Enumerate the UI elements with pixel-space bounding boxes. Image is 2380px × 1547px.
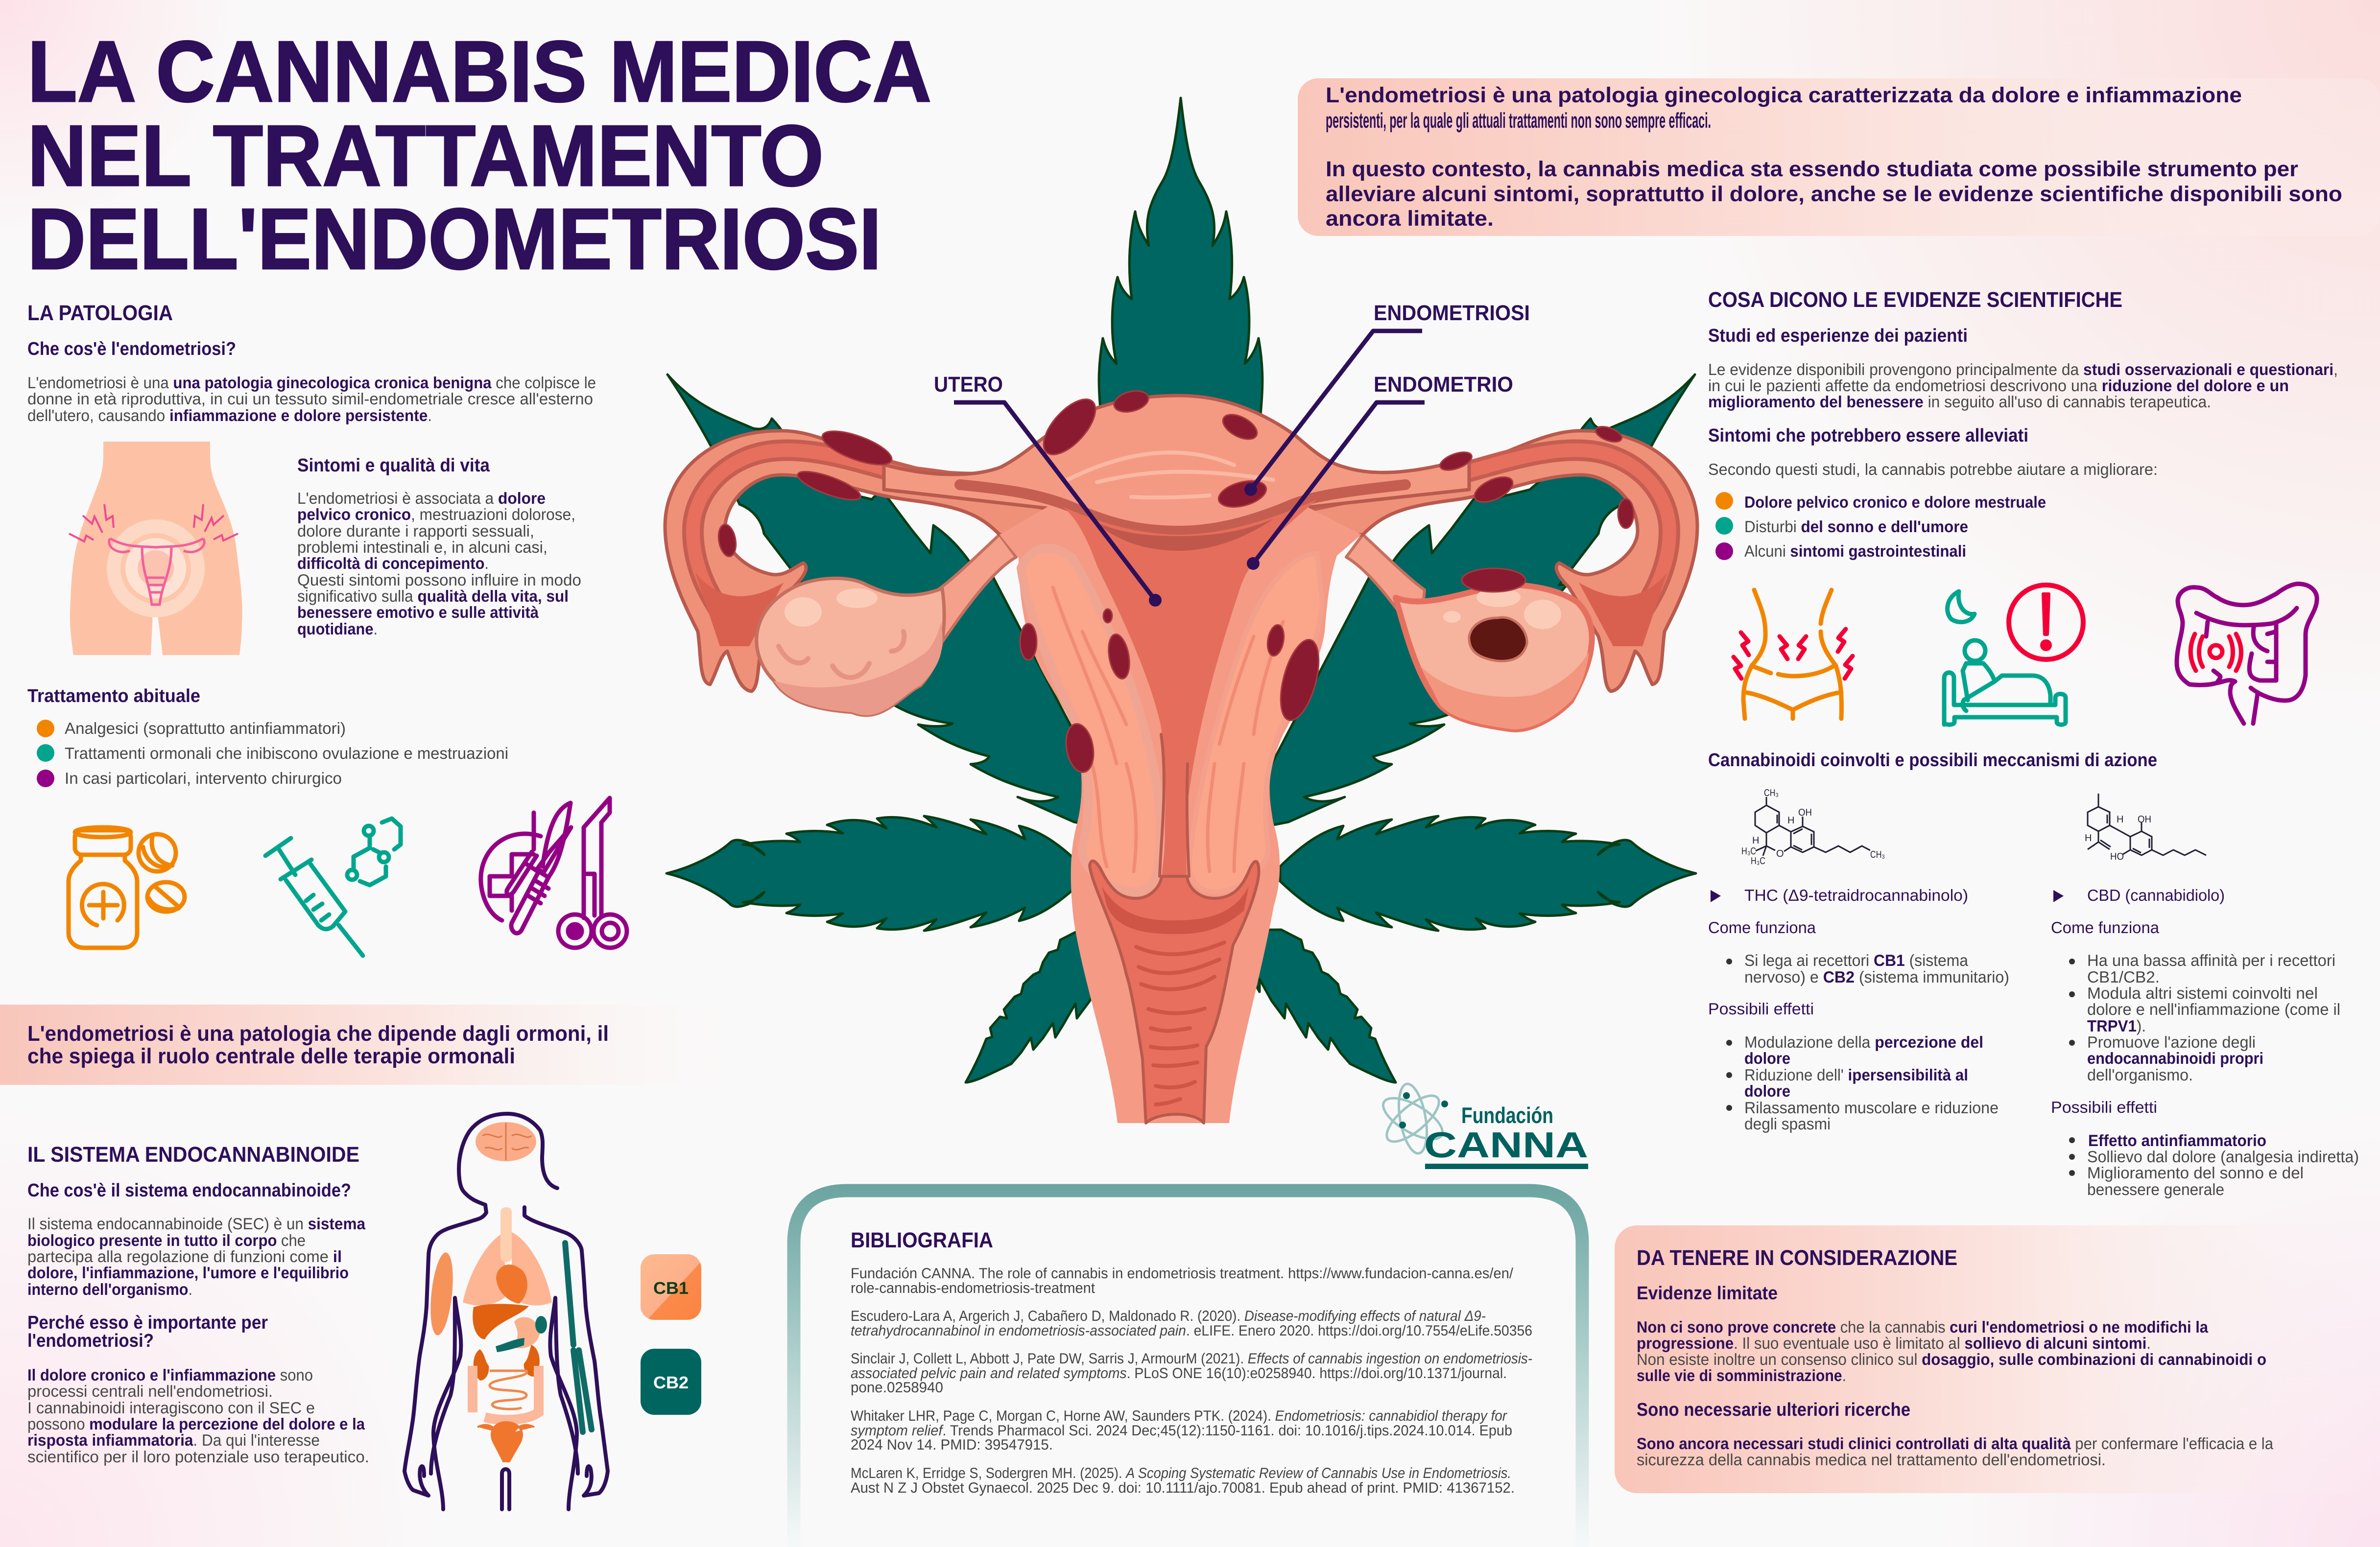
heading: la patologia: LA PATOLOGIA xyxy=(27,301,173,325)
tube continuation over fundus xyxy=(960,485,1405,531)
icon: pelvis with pain xyxy=(69,442,242,655)
list: possibili effetti xyxy=(2069,1131,2359,1198)
trachea xyxy=(500,1207,512,1262)
brain xyxy=(476,1122,536,1161)
panel: intro callout: alleviare alcuni sintomi, soprattutto il dolore, anche se le evidenze scientifiche disponibili sono xyxy=(1326,182,2342,206)
text: evidenze limitate xyxy=(1637,1318,2266,1384)
list: come funziona: Modula altri sistemi coinvolti nel xyxy=(2087,984,2318,1002)
icon: surgery tools xyxy=(481,798,627,948)
liver xyxy=(473,1304,529,1339)
molecule: THC: OH xyxy=(1798,807,1812,818)
molecule: THC: O xyxy=(1776,848,1784,859)
logo: fundación canna: Fundación xyxy=(1461,1102,1553,1128)
text: studi: in cui le pazienti affette da endometriosi descrivono una riduzione del dolore e un xyxy=(1708,376,2289,395)
panel: cosa dicono le evidenze xyxy=(1708,288,2338,771)
subheading: cannabinoidi: Cannabinoidi coinvolti e possibili meccanismi di azione xyxy=(1708,750,2157,771)
dark arc over cavity xyxy=(1097,519,1273,551)
text: definizione xyxy=(27,374,596,424)
label: endometrio: ENDOMETRIO xyxy=(1374,373,1513,397)
text: riferimenti: Sinclair J, Collett L, Abbott J, Pate DW, Sarris J, ArmourM (2021). Effects of cannabis ingestion on endometriosis- xyxy=(851,1351,1532,1367)
list: possibili effetti: Rilassamento muscolare e riduzione xyxy=(1744,1099,1999,1117)
text: riferimenti: associated pelvic pain and related symptoms. PLoS ONE 16(10):e0258940. https://doi.org/10.1371/journal. xyxy=(851,1365,1507,1382)
list: sintomi xyxy=(1715,492,2046,560)
label: endometriosi xyxy=(1244,301,1530,496)
kidneys xyxy=(474,1345,540,1381)
subheading: studi: Studi ed esperienze dei pazienti xyxy=(1708,326,1968,346)
leaf: horizontal right xyxy=(1280,816,1696,931)
list: trattamenti: Analgesici (soprattutto antinfiammatori) xyxy=(65,719,346,737)
text: riferimenti: Escudero-Lara A, Argerich J, Cabañero D, Maldonado R. (2020). Disease-modifying effects of natural Δ9- xyxy=(851,1308,1486,1324)
small intestine xyxy=(490,1371,527,1409)
text: sintomi: significativo sulla qualità della vita, sul xyxy=(297,587,569,605)
list: possibili effetti: Modulazione della percezione del xyxy=(1744,1033,1983,1051)
text: riferimenti: Aust N Z J Obstet Gynaecol. 2025 Dec 9. doi: 10.1111/ajo.70081. Epub ahead of print. PMID: 41367152. xyxy=(851,1480,1515,1496)
icon: syringe and hormone molecule xyxy=(265,819,401,956)
heading: bibliografia: BIBLIOGRAFIA xyxy=(851,1228,993,1252)
panel: bibliografia xyxy=(794,1191,1582,1547)
list: trattamenti: Trattamenti ormonali che inibiscono ovulazione e mestruazioni xyxy=(65,744,508,762)
logo: fundación canna: CANNA xyxy=(1424,1125,1588,1165)
receptor badge CB1: CB1 xyxy=(653,1279,689,1298)
list: come funziona: nervoso) e CB2 (sistema immunitario) xyxy=(1744,968,2009,986)
heading: CBD: CBD (cannabidiolo) xyxy=(2087,886,2225,904)
list: come funziona xyxy=(1726,951,2009,986)
text: sintomi: quotidiane. xyxy=(297,620,378,638)
fundus highlights xyxy=(1068,452,1273,497)
heading: THC: THC (Δ9-tetraidrocannabinolo) xyxy=(1744,886,1968,904)
text: sintomi xyxy=(297,489,581,638)
panel: sintomi e qualità di vita xyxy=(297,455,581,638)
list: come funziona: Si lega ai recettori CB1 (sistema xyxy=(1744,951,1969,969)
logo: fundación canna xyxy=(1377,1082,1588,1169)
text: importanza: processi centrali nell'endometriosi. xyxy=(27,1382,273,1400)
icon: sleep disturbance xyxy=(1944,585,2083,725)
receptor badge CB1 xyxy=(641,1254,701,1320)
title: NEL TRATTAMENTO xyxy=(27,107,824,204)
subheading: come funziona: Come funziona xyxy=(1708,918,1816,937)
text: riferimenti xyxy=(851,1266,1532,1496)
callout: ormoni: L'endometriosi è una patologia che dipende dagli ormoni, il xyxy=(27,1022,609,1046)
molecule: CBD: HO xyxy=(2110,851,2124,862)
panel: intro callout: persistenti, per la quale gli attuali trattamenti non sono sempre efficaci. xyxy=(1326,109,1711,133)
text: ricerche: Sono ancora necessari studi clinici controllati di alta qualità per confermare l'efficacia e la xyxy=(1637,1434,2274,1453)
subheading: sintomi alleviati: Sintomi che potrebbero essere alleviati xyxy=(1708,425,2028,446)
uterine cavity xyxy=(1063,499,1317,896)
leaf: upper left xyxy=(667,375,1126,832)
text: studi: Le evidenze disponibili provengono principalmente da studi osservazionali e questionari, xyxy=(1708,360,2338,378)
molecule: THC: CH₃ xyxy=(1764,788,1779,798)
title xyxy=(27,23,931,287)
subheading: perché xyxy=(27,1313,268,1351)
title: DELL'ENDOMETRIOSI xyxy=(27,190,881,287)
text: definizione: dell'utero, causando infiammazione e dolore persistente. xyxy=(27,406,432,424)
list: possibili effetti: degli spasmi xyxy=(1744,1115,1831,1133)
list: come funziona: endocannabinoidi propri xyxy=(2087,1049,2263,1067)
text: importanza: I cannabinoidi interagiscono con il SEC e xyxy=(27,1399,315,1417)
panel: il sistema endocannabinoide xyxy=(27,1143,369,1466)
text: sintomi: difficoltà di concepimento. xyxy=(297,554,489,572)
illustration: human body with organs xyxy=(405,1114,608,1509)
text: importanza xyxy=(27,1366,369,1466)
molecule: THC: H₃C xyxy=(1751,856,1765,867)
text: riferimenti: pone.0258940 xyxy=(851,1380,943,1396)
callout: ormoni xyxy=(0,1005,735,1085)
uterus fundus xyxy=(884,396,1469,531)
leaf: lower left xyxy=(966,930,1126,1082)
text: ricerche xyxy=(1637,1434,2274,1469)
list: come funziona: Ha una bassa affinità per i recettori xyxy=(2087,951,2335,969)
list: possibili effetti: dolore xyxy=(1744,1049,1790,1067)
large intestine xyxy=(473,1366,539,1420)
list: come funziona: dolore e nell'infiammazione (come il xyxy=(2087,1000,2340,1018)
ovary left xyxy=(757,578,944,715)
molecule: THC: H xyxy=(1787,815,1794,826)
leaf: upper right xyxy=(1236,375,1695,832)
pancreas xyxy=(496,1338,524,1352)
panel: la patologia xyxy=(27,301,596,424)
text: riferimenti: role-cannabis-endometriosis-treatment xyxy=(851,1280,1095,1296)
text: definizione: donne in età riproduttiva, in cui un tessuto simil-endometriale cresce all'esterno xyxy=(27,390,593,408)
text: sintomi: Questi sintomi possono influire in modo xyxy=(297,571,581,589)
molecule: CBD xyxy=(2085,794,2206,862)
text: riferimenti: McLaren K, Erridge S, Sodergren MH. (2025). A Scoping Systematic Review of Cannabis Use in Endometriosis. xyxy=(851,1465,1511,1481)
vaginal rugae xyxy=(1102,886,1249,934)
list: possibili effetti: Effetto antinfiammatorio xyxy=(2088,1131,2266,1149)
text: importanza: Il dolore cronico e l'infiammazione sono xyxy=(27,1366,313,1384)
ovary right with cyst xyxy=(1396,585,1592,729)
text: importanza: risposta infiammatoria. Da qui l'interesse xyxy=(27,1431,320,1449)
panel: THC xyxy=(1708,886,2009,1133)
text: evidenze limitate: sulle vie di somministrazione. xyxy=(1637,1366,1846,1384)
label: utero xyxy=(934,373,1162,607)
small uterus xyxy=(477,1422,534,1461)
subheading: trattamento: Trattamento abituale xyxy=(27,686,200,706)
list: possibili effetti: Miglioramento del sonno e del xyxy=(2087,1164,2304,1182)
panel: trattamento abituale xyxy=(27,686,627,956)
spleen xyxy=(535,1316,547,1334)
label: endometrio xyxy=(1247,373,1513,570)
leaf: horizontal left xyxy=(666,816,1082,931)
text: sintomi: benessere emotivo e sulle attività xyxy=(297,603,539,621)
molecule: CBD: OH xyxy=(2138,814,2151,825)
molecule: THC: CH₃ xyxy=(1870,849,1885,860)
uterine wall, right lobe xyxy=(1189,553,1322,892)
text: riferimenti: symptom relief. Trends Pharmacol Sci. 2024 Dec;45(12):1150-1161. doi: 10.1016/j.tips.2024.10.014. Epub xyxy=(851,1423,1512,1439)
callout: ormoni: che spiega il ruolo centrale delle terapie ormonali xyxy=(27,1044,515,1068)
list: possibili effetti xyxy=(1726,1033,1999,1133)
list: come funziona xyxy=(2069,951,2340,1084)
text: definizione SEC: dolore, l'infiammazione, l'umore e l'equilibrio xyxy=(27,1264,349,1282)
fallopian tube and ligament, right xyxy=(1285,431,1697,691)
text: definizione SEC: interno dell'organismo. xyxy=(27,1280,192,1298)
leaf: lower right xyxy=(1235,930,1396,1082)
molecule: CBD: H xyxy=(2085,833,2092,844)
subheading: ulteriori ricerche: Sono necessarie ulteriori ricerche xyxy=(1637,1400,1910,1420)
molecule: THC: H₃C xyxy=(1741,846,1756,857)
heart xyxy=(496,1265,527,1304)
panel: intro callout: In questo contesto, la cannabis medica sta essendo studiata come possibile strumento per xyxy=(1326,157,2298,181)
panel: CBD xyxy=(2051,886,2359,1198)
text: definizione SEC: partecipa alla regolazione di funzioni come il xyxy=(27,1247,342,1266)
fallopian tube and ligament, left xyxy=(665,431,1077,691)
text: evidenze limitate: Non ci sono prove concrete che la cannabis curi l'endometriosi o ne modifichi la xyxy=(1637,1318,2209,1336)
text: sintomi: L'endometriosi è associata a dolore xyxy=(297,489,546,507)
text: ricerche: sicurezza della cannabis medica nel trattamento dell'endometriosi. xyxy=(1637,1451,2106,1469)
list: sintomi: Disturbi del sonno e dell'umore xyxy=(1744,517,1968,536)
endometriosis lesions xyxy=(716,387,1634,774)
text: definizione SEC: biologico presente in tutto il corpo che xyxy=(27,1231,306,1249)
text: evidenze limitate: progressione. Il suo eventuale uso è limitato al sollievo di alcuni sintomi. xyxy=(1637,1334,2151,1352)
panel: intro callout xyxy=(1298,78,2380,236)
text: riferimenti: tetrahydrocannabinol in endometriosis-associated pain. eLIFE. Enero 2020. https://doi.org/10.7554/eLife.50356 xyxy=(851,1323,1532,1339)
text: sintomi: problemi intestinali e, in alcuni casi, xyxy=(297,538,547,556)
subheading: evidenze limitate: Evidenze limitate xyxy=(1637,1283,1778,1304)
list: possibili effetti: benessere generale xyxy=(2087,1180,2224,1198)
list: come funziona: dell'organismo. xyxy=(2087,1066,2193,1084)
list: possibili effetti: dolore xyxy=(1744,1082,1790,1100)
subheading: possibili effetti: Possibili effetti xyxy=(2051,1098,2157,1116)
text: riferimenti: 2024 Nov 14. PMID: 39547915. xyxy=(851,1437,1053,1453)
list: trattamenti xyxy=(37,719,508,787)
text: riferimenti: Whitaker LHR, Page C, Morgan C, Horne AW, Saunders PTK. (2024). Endometriosis: cannabidiol therapy for xyxy=(851,1408,1507,1424)
subheading: possibili effetti: Possibili effetti xyxy=(1708,1000,1814,1018)
leaf: top xyxy=(1099,98,1262,421)
label: endometriosi: ENDOMETRIOSI xyxy=(1374,301,1530,325)
list: come funziona: Promuove l'azione degli xyxy=(2087,1033,2256,1051)
panel: intro callout: ancora limitate. xyxy=(1326,207,1494,231)
text: definizione: L'endometriosi è una una patologia ginecologica cronica benigna che colpisce le xyxy=(27,374,596,392)
panel: intro callout: L'endometriosi è una patologia ginecologica caratterizzata da dolore e infiammazione xyxy=(1326,83,2242,107)
subheading: perché: Perché esso è importante per xyxy=(27,1313,268,1333)
illustration: cannabis leaf xyxy=(666,98,1696,1082)
list: possibili effetti: Sollievo dal dolore (analgesia indiretta) xyxy=(2087,1148,2359,1166)
list: sintomi: Dolore pelvico cronico e dolore mestruale xyxy=(1744,493,2046,511)
text: definizione SEC xyxy=(27,1215,366,1298)
heading: da tenere: DA TENERE IN CONSIDERAZIONE xyxy=(1637,1246,1957,1270)
list: trattamenti: In casi particolari, intervento chirurgico xyxy=(65,769,342,787)
molecule: CBD: H xyxy=(2117,814,2123,825)
subheading: che cos'è il sistema: Che cos'è il sistema endocannabinoide? xyxy=(27,1180,351,1201)
text: sintomi: dolore durante i rapporti sessuali, xyxy=(297,522,534,540)
subheading: che cos'è: Che cos'è l'endometriosi? xyxy=(27,339,236,359)
label: utero: UTERO xyxy=(934,373,1003,397)
text: importanza: scientifico per il loro potenziale uso terapeutico. xyxy=(27,1448,369,1466)
heading: sistema endocannabinoide: IL SISTEMA ENDOCANNABINOIDE xyxy=(27,1143,359,1167)
text: importanza: possono modulare la percezione del dolore e la xyxy=(27,1415,365,1433)
uterine wall, left lobe xyxy=(1021,548,1161,892)
stomach xyxy=(512,1317,540,1348)
icon: medicine bottle and pills xyxy=(69,827,185,948)
title: LA CANNABIS MEDICA xyxy=(27,23,931,120)
illustration: uterus anatomy xyxy=(665,387,1697,1123)
text: evidenze limitate: Non esiste inoltre un consenso clinico sul dosaggio, sulle combinazioni di cannabinoidi o xyxy=(1637,1350,2266,1368)
text: studi: miglioramento del benessere in seguito all'uso di cannabis terapeutica. xyxy=(1708,393,2211,411)
panel: da tenere in considerazione xyxy=(1615,1225,2380,1493)
list: come funziona: CB1/CB2. xyxy=(2087,968,2160,986)
text: riferimenti: Fundación CANNA. The role of cannabis in endometriosis treatment. https://www.fundacion-canna.es/en/ xyxy=(851,1266,1514,1282)
molecule: THC xyxy=(1741,788,1885,867)
lungs xyxy=(463,1232,552,1306)
list: sintomi: Alcuni sintomi gastrointestinali xyxy=(1744,542,1966,560)
list: possibili effetti: Riduzione dell' ipersensibilità al xyxy=(1744,1066,1968,1084)
cervical canal lines xyxy=(1160,734,1189,876)
uterus and vagina body xyxy=(1000,490,1361,1123)
icon: gastrointestinal xyxy=(2177,584,2317,724)
icon: pelvic pain xyxy=(1734,590,1853,719)
text: sintomi: pelvico cronico, mestruazioni dolorose, xyxy=(297,505,575,523)
receptor badge CB2 xyxy=(641,1349,701,1415)
arm muscle xyxy=(427,1251,456,1336)
receptor badge CB2: CB2 xyxy=(653,1373,689,1392)
text: definizione SEC: Il sistema endocannabinoide (SEC) è un sistema xyxy=(27,1215,366,1233)
arm bones xyxy=(565,1243,592,1432)
subheading: come funziona: Come funziona xyxy=(2051,918,2160,937)
subheading: sintomi: Sintomi e qualità di vita xyxy=(297,455,490,476)
subheading: perché: l'endometriosi? xyxy=(27,1331,154,1351)
wall streaks xyxy=(1053,587,1283,871)
text: studi xyxy=(1708,360,2338,411)
list: come funziona: TRPV1). xyxy=(2087,1017,2146,1035)
heading: evidenze scientifiche: COSA DICONO LE EVIDENZE SCIENTIFICHE xyxy=(1708,288,2122,312)
body outline xyxy=(405,1114,608,1509)
text: secondo questi studi: Secondo questi studi, la cannabis potrebbe aiutare a migliorare: xyxy=(1708,460,2158,478)
molecule: THC: H xyxy=(1752,835,1759,846)
vaginal canal xyxy=(1090,861,1259,1123)
